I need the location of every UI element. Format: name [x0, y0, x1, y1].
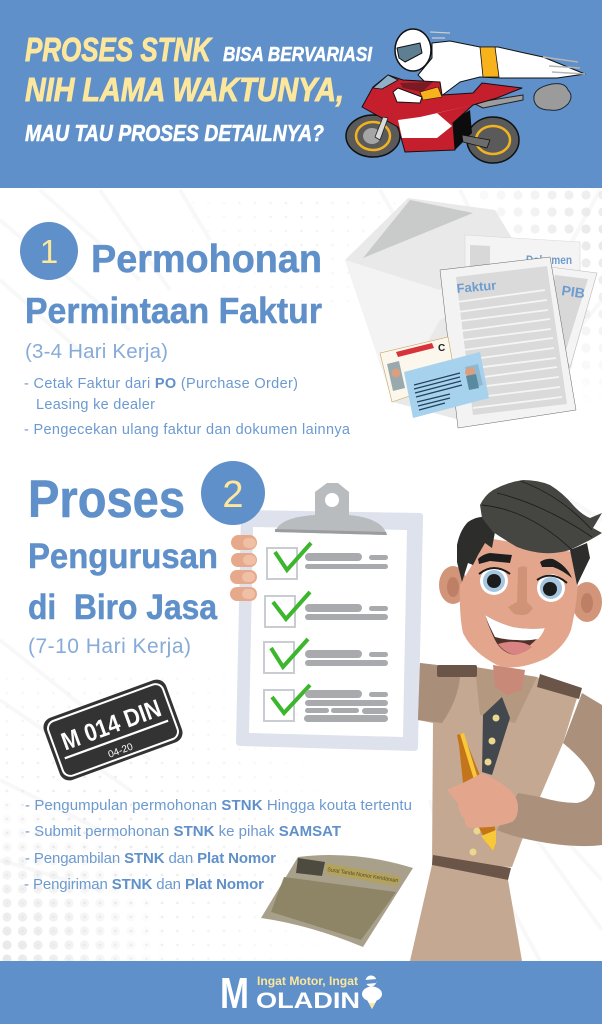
logo: mascot	[362, 976, 382, 1009]
headline line 1	[25, 31, 372, 68]
footer banner	[0, 961, 602, 1024]
plate expiry: 04-20	[107, 741, 135, 761]
logo: Moladin wordmark: OLADIN	[256, 988, 360, 1013]
title: Permohonan: Permohonan	[91, 238, 322, 281]
bullet list: section 2: - Pengambilan STNK dan Plat Nomor	[25, 850, 276, 867]
section 1 heading	[20, 222, 322, 331]
document: Dokumen	[465, 235, 580, 275]
checklist item 4	[264, 685, 388, 722]
officer: pen	[457, 733, 496, 851]
bullet list: section 2	[24, 797, 412, 893]
illustration: STNK booklet	[261, 855, 413, 947]
officer: mouth	[485, 615, 545, 655]
officer: hair	[457, 480, 602, 585]
plate number: M 014 DIN	[58, 694, 165, 756]
bullet list: section 1: - Cetak Faktur dari PO (Purchase Order)	[24, 376, 298, 392]
officer: eyes	[479, 567, 567, 602]
title: di Biro Jasa: di Biro Jasa	[28, 588, 217, 627]
document: Faktur	[440, 257, 576, 428]
headline line 2: NIH LAMA WAKTUNYA,	[25, 71, 344, 108]
card: driving licence: C	[438, 343, 445, 354]
logo: Moladin wordmark	[220, 969, 360, 1018]
logo: Moladin wordmark: M	[220, 969, 249, 1018]
officer: ears	[439, 566, 602, 622]
illustration: smiling officer	[410, 480, 602, 961]
document: PIB	[540, 267, 597, 368]
illustration: envelope, documents and ID cards	[345, 198, 597, 428]
bullet list: section 1: - Pengecekan ulang faktur dan dokumen lainnya	[24, 422, 351, 438]
title: Pengurusan: Pengurusan	[28, 537, 218, 576]
title: Permintaan Faktur: Permintaan Faktur	[25, 290, 322, 331]
officer: face	[460, 538, 578, 667]
illustration: licence plate	[41, 677, 185, 783]
card: ID card	[404, 352, 489, 418]
clipboard clip	[275, 483, 387, 535]
illustration: motorcycle rider	[346, 29, 585, 163]
illustration: clipboard checklist	[201, 461, 423, 751]
bullet list: section 1: Leasing ke dealer	[36, 397, 155, 413]
fingers	[230, 535, 257, 601]
officer: eyebrows	[478, 553, 572, 578]
title: Proses: Proses	[28, 470, 185, 529]
headline line 3: MAU TAU PROSES DETAILNYA?	[25, 120, 324, 146]
headline line 1: BISA BERVARIASI	[223, 44, 372, 66]
document: Dokumen: Dokumen	[526, 253, 572, 267]
badge 2: 2	[222, 474, 244, 516]
bullet list: section 2: - Pengiriman STNK dan Plat Nomor	[24, 876, 264, 893]
envelope	[345, 198, 530, 420]
bullet list: section 2: - Submit permohonan STNK ke pihak SAMSAT	[25, 823, 341, 840]
logo: Moladin wordmark: Ingat Motor, Ingat	[257, 974, 358, 988]
officer: nose	[508, 566, 533, 615]
duration: section 1: (3-4 Hari Kerja)	[25, 340, 168, 363]
document: Faktur: Faktur	[456, 278, 497, 296]
duration: section 2: (7-10 Hari Kerja)	[28, 635, 191, 658]
headline line 1: PROSES STNK	[25, 31, 213, 68]
checklist item 2	[265, 592, 388, 627]
bullet list: section 2: - Pengumpulan permohonan STNK Hingga kouta tertentu	[25, 797, 412, 814]
checklist item 1	[267, 543, 388, 579]
number badge 1: 1	[40, 233, 58, 270]
officer: hand	[447, 773, 518, 828]
clipboard board	[236, 510, 423, 751]
bullet list: section 1	[24, 376, 351, 438]
document: PIB: PIB	[561, 282, 586, 301]
card: driving licence	[380, 337, 456, 402]
header banner	[0, 0, 602, 188]
officer: uniform body	[410, 663, 602, 961]
badge 2	[201, 461, 265, 525]
booklet label: Surat Tanda Nomor Kendaraan	[327, 867, 399, 884]
number badge 1	[20, 222, 78, 280]
checklist item 3	[264, 639, 388, 673]
section 2 heading	[28, 470, 218, 627]
